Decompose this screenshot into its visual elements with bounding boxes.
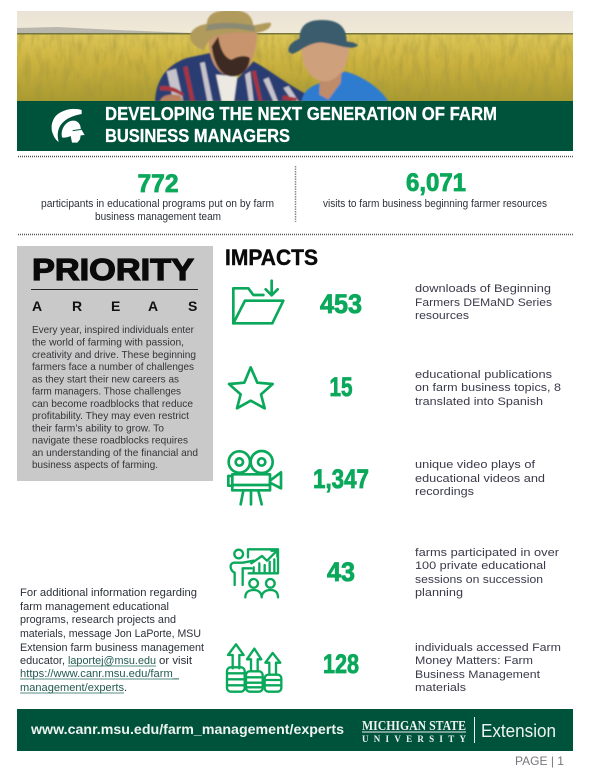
impact text: farms participated: sessions on succession xyxy=(415,574,543,586)
text block: additional information: Extension farm business management xyxy=(20,642,204,654)
icon: folder download xyxy=(233,281,283,323)
impact text: farm money matters: Money Matters: Farm xyxy=(415,655,533,667)
impact text: farm money matters: individuals accessed Farm xyxy=(415,642,561,654)
icon: coin stacks with up arrows xyxy=(227,644,281,692)
impact number: 43: 43 xyxy=(327,557,355,587)
impact text: downloads: resources xyxy=(415,310,470,322)
impact text: farm money matters: materials xyxy=(415,682,467,694)
subheading: areas: A xyxy=(32,298,42,314)
stat: 6,071 visits: visits to farm business beginning farmer resources xyxy=(323,198,547,210)
text block: additional information: For additional information regarding xyxy=(20,587,197,599)
stat: 6,071 visits: 6,071 xyxy=(406,169,466,197)
priority body text: the world of farming with passion, xyxy=(32,338,184,348)
stat: 772 participants xyxy=(41,170,277,223)
stat: 772 participants: business management team xyxy=(95,211,221,223)
text block: additional information: https://www.canr.msu.edu/farm_ xyxy=(20,668,180,680)
text block: additional information: educator, xyxy=(20,655,65,667)
subheading: areas: A xyxy=(148,298,158,314)
icon: star xyxy=(229,367,273,408)
priority body text: navigate these roadblocks requires xyxy=(32,436,188,446)
icon: film camera xyxy=(228,451,281,504)
impact text: video plays: unique video plays of xyxy=(415,459,536,471)
subheading: areas: S xyxy=(188,298,197,314)
impact text: downloads: Farmers DEMaND Series xyxy=(415,297,553,309)
impact text: farms participated: 100 private educational xyxy=(415,560,546,572)
impact number: 15: 15 xyxy=(330,372,352,402)
impact text: farms participated: farms participated in over xyxy=(415,547,559,559)
panel: priority areas xyxy=(17,246,213,481)
priority body text: an understanding of the financial and xyxy=(32,448,198,459)
stat: 772 participants: participants in educational programs put on by farm xyxy=(41,198,274,210)
priority body text: their farm’s ability to grow. To xyxy=(32,424,164,434)
footer bar xyxy=(17,709,573,751)
text block: additional information xyxy=(20,587,207,694)
heading: impacts: IMPACTS xyxy=(225,245,318,270)
priority body text: profitability. They may even restrict xyxy=(32,411,189,422)
impact text: video plays: recordings xyxy=(415,486,475,498)
impact number: 1,347: 1,347 xyxy=(313,464,369,494)
title band xyxy=(17,101,573,151)
priority body text: business aspects of farming. xyxy=(32,460,158,471)
title text: BUSINESS MANAGERS xyxy=(105,126,290,146)
title text: DEVELOPING THE NEXT GENERATION OF FARM xyxy=(105,104,497,124)
text block: additional information: farm management educational xyxy=(20,601,169,613)
boy xyxy=(288,20,388,101)
subheading: areas: R xyxy=(72,298,82,314)
text block: additional information: materials, message Jon LaPorte, MSU xyxy=(20,628,201,640)
impact text: farm money matters: Business Management xyxy=(415,669,540,681)
priority body text: Every year, inspired individuals enter xyxy=(32,325,195,336)
icon: presenter with chart xyxy=(231,549,278,597)
priority body text: creativity and drive. These beginning xyxy=(32,350,196,361)
impact text: publications: educational publications xyxy=(415,369,553,381)
icon: Spartan helmet logo xyxy=(52,109,85,143)
logo: Michigan State University Extension: MICHIGAN STATE xyxy=(362,719,466,734)
impact text: farms participated: planning xyxy=(415,587,463,599)
impact text: downloads: downloads of Beginning xyxy=(415,283,551,295)
footer url: www.canr.msu.edu/farm_management/experts xyxy=(30,721,344,737)
text block: additional information: . xyxy=(124,682,127,694)
priority body text: farmers face a number of challenges xyxy=(32,362,194,373)
heading: priority: PRIORITY xyxy=(32,252,194,287)
impact number: 453: 453 xyxy=(320,289,362,319)
impact text: video plays: educational videos and xyxy=(415,473,545,485)
priority body text: can become roadblocks that reduce xyxy=(32,399,193,410)
logo: Michigan State University Extension: Extension xyxy=(481,721,556,741)
priority body text: farm managers. Those challenges xyxy=(32,386,181,398)
impact text: publications: translated into Spanish xyxy=(415,396,543,408)
priority body text: as they start their new careers as xyxy=(32,374,179,386)
subheading: areas: E xyxy=(111,298,120,314)
text block: additional information: management/experts xyxy=(20,682,124,694)
stat: 772 participants: 772 xyxy=(138,170,178,198)
text block: additional information: programs, research projects and xyxy=(20,614,176,626)
stat: 6,071 visits xyxy=(323,169,547,210)
hero photo: farmer and boy in wheat field xyxy=(17,10,573,101)
page number: PAGE | 1 xyxy=(515,754,564,768)
man xyxy=(155,10,320,101)
impact number: 128: 128 xyxy=(323,649,359,679)
text block: additional information: or visit xyxy=(159,655,192,667)
impact text: publications: on farm business topics, 8 xyxy=(415,382,561,394)
text block: additional information: laportej@msu.edu xyxy=(68,655,156,667)
logo: Michigan State University Extension: UNIVERSITY xyxy=(362,734,466,744)
logo: Michigan State University Extension xyxy=(362,717,556,744)
